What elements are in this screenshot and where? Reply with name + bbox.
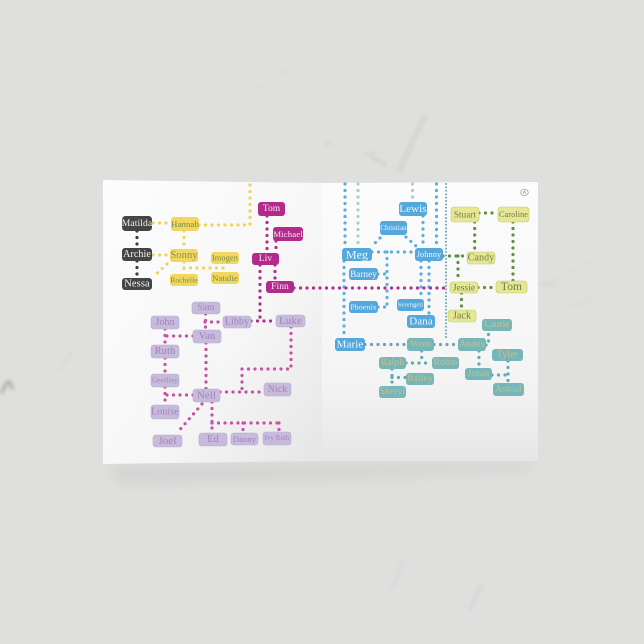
- name: Ed: Ed: [207, 434, 220, 445]
- group: Meg's line (blue): [335, 202, 443, 351]
- name: Laurie: Laurie: [484, 320, 510, 330]
- icon: small circled mark: [521, 189, 528, 196]
- name: Archie: Archie: [123, 249, 151, 260]
- name: John: [151, 316, 179, 329]
- name: Sam: [192, 302, 220, 314]
- group: Tom's line (magenta): [252, 202, 303, 293]
- name: Ivy Ruth: Ivy Ruth: [265, 435, 290, 442]
- name: Lewis: Lewis: [399, 203, 427, 215]
- name: Rochelle: Rochelle: [170, 276, 198, 284]
- name: Serengeti: Serengeti: [398, 302, 423, 308]
- name: Liv: Liv: [259, 254, 272, 264]
- name: Ruth: [151, 345, 179, 358]
- name: Caroline: Caroline: [499, 210, 528, 219]
- name: Astrial: [493, 383, 524, 396]
- name: Johnny: [415, 248, 443, 261]
- name: Stuart: Stuart: [454, 210, 476, 220]
- name: Libby: Libby: [225, 316, 249, 328]
- name: Van: [193, 330, 221, 343]
- name: Wren: Wren: [410, 340, 431, 350]
- name: Phoenix: Phoenix: [350, 302, 377, 312]
- name: Luke: Luke: [279, 315, 302, 327]
- group: Wren's line (teal): [379, 319, 524, 398]
- name: Candy: Candy: [468, 252, 494, 264]
- name: Finn: Finn: [271, 282, 289, 292]
- name: Geoffrey: [151, 374, 179, 387]
- name: Barney: Barney: [350, 269, 377, 279]
- name: Matilda: Matilda: [122, 218, 153, 229]
- name: Nell: Nell: [197, 390, 216, 402]
- name: Danny: Danny: [233, 434, 257, 444]
- group: Matilda's line (dark): [122, 216, 153, 290]
- name: Marie: Marie: [337, 338, 363, 350]
- name: Tyler: [492, 349, 523, 361]
- name: Sam: Sam: [197, 303, 215, 313]
- name: Joel: [153, 435, 182, 447]
- name: Phoenix: [349, 301, 378, 313]
- name: Nick: [264, 383, 291, 396]
- name: Louise: Louise: [151, 406, 179, 418]
- name: Jonas: [465, 368, 492, 380]
- group: Hannah's line (yellow): [170, 217, 239, 286]
- name: Geoffrey: Geoffrey: [152, 376, 178, 384]
- name: Nessa: Nessa: [124, 278, 150, 290]
- name: Robin: Robin: [434, 358, 458, 368]
- name: John: John: [155, 317, 175, 328]
- group: Van and Nell's line (lilac): [151, 302, 305, 447]
- name: Christian: [380, 221, 407, 235]
- name: Bailey: Bailey: [407, 374, 433, 384]
- name: Tom (right): Tom: [501, 281, 522, 293]
- name: Michael: Michael: [273, 229, 303, 239]
- group: Stuart's line (lime): [448, 207, 529, 322]
- connector lines: [137, 182, 513, 433]
- name: Tyler: Tyler: [497, 350, 519, 360]
- name: Christian: Christian: [380, 224, 407, 232]
- name: Sheryl: Sheryl: [380, 387, 405, 397]
- name: Wren: [407, 338, 434, 351]
- name: Jonas: Jonas: [468, 369, 490, 379]
- name: Dana: Dana: [409, 316, 433, 328]
- name: Tom: Tom: [263, 204, 281, 214]
- name: Andus: Andus: [459, 340, 485, 350]
- name: Natalie: Natalie: [212, 273, 238, 283]
- name: Hannah: Hannah: [171, 219, 199, 229]
- name: Ruth: Ruth: [155, 346, 176, 357]
- folded card: [103, 180, 538, 464]
- name: Van: Van: [199, 331, 216, 342]
- name: Nick: Nick: [268, 384, 287, 395]
- name: Sonny: Sonny: [170, 250, 198, 261]
- name: Jack: Jack: [453, 310, 471, 322]
- name: Ed: [199, 433, 227, 446]
- name: Ivy Ruth: [263, 432, 291, 445]
- name: Nell: [193, 389, 220, 402]
- name: Andus: [458, 338, 486, 351]
- name: Imogen: Imogen: [212, 254, 239, 262]
- name: Astrial: Astrial: [495, 384, 522, 394]
- name: Meg: Meg: [346, 248, 368, 262]
- name: Ralph: Ralph: [381, 358, 404, 368]
- name: Johnny: Johnny: [417, 250, 442, 259]
- name: Joel: Joel: [158, 435, 177, 447]
- name: Serengeti: [397, 299, 424, 311]
- name: Jessie: Jessie: [453, 282, 475, 292]
